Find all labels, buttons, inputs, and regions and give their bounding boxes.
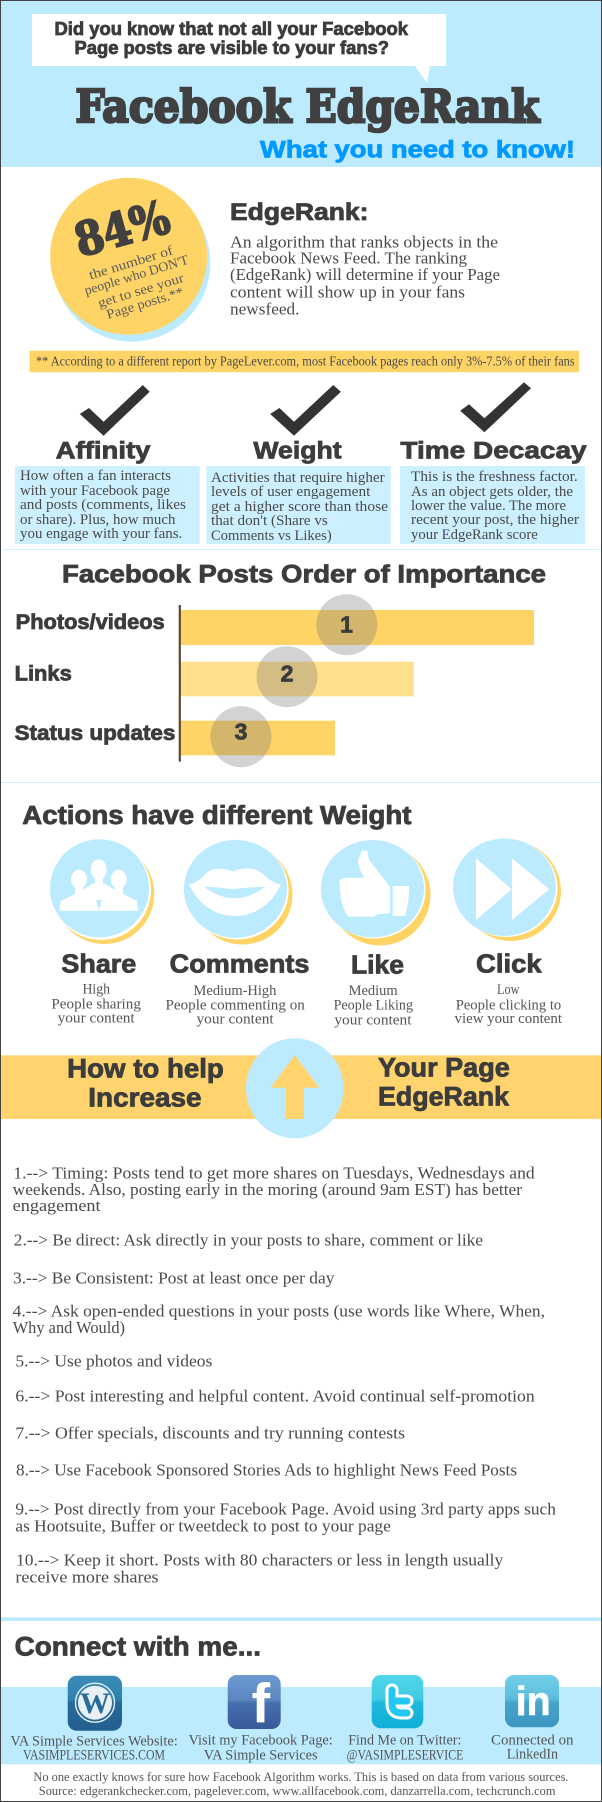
- definition text: newsfeed.: [230, 299, 300, 318]
- facebook link text: VA Simple Services: [204, 1748, 318, 1764]
- icon: check mark: [460, 382, 531, 432]
- share description: High: [82, 981, 110, 997]
- twitter link text: [347, 1732, 463, 1764]
- tip 9: 9.--> Post directly from your Facebook Page. Avoid using 3rd party apps such: [15, 1499, 557, 1518]
- tip 1: [13, 1163, 535, 1215]
- weight text box: Activities that require higher: [211, 470, 385, 486]
- banner text left: Increase: [88, 1083, 202, 1113]
- tip 6: 6.--> Post interesting and helpful content. Avoid continual self-promotion: [15, 1386, 535, 1405]
- tip 10: receive more shares: [15, 1567, 159, 1586]
- icon: people: [50, 839, 154, 944]
- website link text: VASIMPLESERVICES.COM: [23, 1748, 165, 1764]
- action: comments: [166, 840, 309, 1027]
- label: photos and videos: Photos/videos: [16, 610, 165, 634]
- subtitle: What you need to know!: [260, 137, 575, 164]
- tip 4: Why and Would): [13, 1318, 125, 1337]
- banner text right: EdgeRank: [378, 1082, 509, 1112]
- like description: your content: [334, 1012, 412, 1028]
- icon: fast forward: [453, 838, 561, 941]
- rank marker 2: [256, 646, 318, 707]
- weight text box: get a higher score than those: [211, 499, 388, 515]
- stat number: 84%: [69, 190, 175, 268]
- footer sources: No one exactly knows for sure how Facebook Algorithm works. This is based on data from various sources.: [33, 1769, 568, 1784]
- affinity text box: How often a fan interacts: [20, 468, 171, 484]
- affinity text box: with your Facebook page: [20, 483, 170, 499]
- panel: weight: [206, 385, 391, 544]
- action: click: [453, 838, 563, 1027]
- time decacay text box: lower the value. The more: [411, 498, 566, 514]
- connect background band: [0, 1687, 602, 1764]
- comments description: People commenting on: [166, 997, 305, 1013]
- linkedin link text: LinkedIn: [507, 1746, 558, 1762]
- tip 7: 7.--> Offer specials, discounts and try running contests: [15, 1423, 405, 1442]
- affinity text box: or share). Plus, how much: [20, 512, 176, 528]
- affinity text box: [15, 466, 200, 544]
- stat caption: get to see your: [96, 270, 186, 310]
- tip 4: 4.--> Ask open-ended questions in your posts (use words like Where, When,: [13, 1301, 545, 1320]
- rank marker 3: [210, 706, 271, 767]
- panel: EdgeRank definition: [230, 199, 500, 318]
- linkedin link text: [491, 1732, 574, 1762]
- footnote bar: [30, 351, 579, 372]
- time decacay text box: [400, 466, 585, 544]
- panel: posts order of importance: [15, 561, 546, 767]
- banner text left: [67, 1054, 224, 1113]
- action: share: [50, 839, 154, 1026]
- icon: wordpress: W: [80, 1687, 110, 1720]
- rank marker 1: 1: [340, 612, 353, 638]
- twitter link text: Find Me on Twitter:: [348, 1732, 461, 1748]
- like description: [334, 983, 413, 1028]
- share description: People sharing: [51, 996, 141, 1012]
- like description: People Liking: [334, 997, 413, 1013]
- label: status updates: Status updates: [15, 721, 175, 745]
- tip 3: 3.--> Be Consistent: Post at least once per day: [13, 1268, 335, 1287]
- comments description: your content: [196, 1011, 275, 1027]
- tip 2: 2.--> Be direct: Ask directly in your posts to share, comment or like: [14, 1230, 483, 1249]
- speech bubble: Page posts are visible to your fans?: [74, 37, 389, 58]
- weight heading: Weight: [253, 437, 342, 464]
- icon: check mark: [270, 385, 341, 436]
- time decacay text box: This is the freshness factor.: [411, 469, 578, 485]
- click description: [454, 982, 563, 1027]
- weight text box: [206, 466, 391, 544]
- footer sources: [33, 1769, 568, 1798]
- bar: status updates: [181, 721, 335, 755]
- affinity text box: you engage with your fans.: [20, 526, 182, 542]
- tip 4: [13, 1301, 545, 1337]
- time decacay text box: recent your post, the higher: [411, 512, 579, 528]
- banner text right: [378, 1053, 510, 1112]
- panel: connect with me: [0, 1632, 602, 1764]
- comments label: Comments: [170, 949, 309, 979]
- affinity text box: and posts (comments, likes: [20, 497, 186, 513]
- rank marker 1: [316, 594, 377, 655]
- twitter link text: @VASIMPLESERVICE: [347, 1748, 463, 1764]
- speech bubble: [32, 14, 446, 83]
- tip 1: weekends. Also, posting early in the moring (around 9am EST) has better: [13, 1180, 523, 1199]
- banner text left: How to help: [67, 1054, 224, 1084]
- time decacay text box: your EdgeRank score: [411, 527, 538, 543]
- like label: Like: [351, 949, 404, 979]
- panel: how to increase banner: [0, 1038, 602, 1138]
- definition text: (EdgeRank) will determine if your Page: [230, 265, 500, 284]
- header background: [0, 0, 602, 167]
- rank marker 3: 3: [235, 718, 247, 744]
- action: like: [321, 840, 430, 1028]
- chart heading: Facebook Posts Order of Importance: [62, 561, 546, 589]
- tip 9: as Hootsuite, Buffer or tweetdeck to post to your page: [15, 1516, 391, 1535]
- circle shadow: [53, 184, 210, 342]
- definition text: content will show up in your fans: [230, 282, 465, 301]
- linkedin link text: Connected on: [491, 1732, 574, 1748]
- banner background: [0, 1055, 602, 1119]
- like description: Medium: [349, 983, 398, 999]
- chart axis: [179, 605, 181, 762]
- comments description: [166, 983, 305, 1027]
- time decacay heading: Time Decacay: [400, 437, 587, 464]
- icon: check mark: [80, 385, 150, 436]
- banner text right: Your Page: [378, 1053, 510, 1083]
- definition text: An algorithm that ranks objects in the: [230, 232, 498, 251]
- stat caption: [82, 242, 191, 322]
- tip 10: [15, 1550, 504, 1586]
- stat caption: people who DON'T: [82, 252, 191, 298]
- definition text: Facebook News Feed. The ranking: [230, 248, 467, 267]
- panel: affinity: [15, 385, 200, 544]
- icon: linkedin: in: [516, 1678, 551, 1724]
- circle: [50, 178, 207, 335]
- tip 8: 8.--> Use Facebook Sponsored Stories Ads to highlight News Feed Posts: [16, 1460, 517, 1479]
- header panel: [0, 0, 602, 167]
- share description: [51, 981, 141, 1026]
- panel: actions have different weight: [22, 802, 563, 1028]
- comments description: Medium-High: [194, 983, 277, 999]
- time decacay text box: As an object gets older, the: [411, 484, 573, 500]
- affinity heading: Affinity: [56, 437, 151, 464]
- click description: view your content: [454, 1011, 563, 1027]
- icon: wordpress: [68, 1676, 122, 1731]
- definition text: [230, 232, 500, 318]
- weight text box: Comments vs Likes): [211, 528, 332, 544]
- panel: time decay: [400, 382, 587, 544]
- icon: facebook: [228, 1671, 281, 1734]
- label: links: Links: [15, 662, 72, 686]
- weight text box: levels of user engagement: [211, 484, 371, 500]
- share description: your content: [58, 1010, 136, 1026]
- speech bubble: Did you know that not all your Facebook: [54, 18, 409, 39]
- facebook link text: [188, 1732, 333, 1764]
- facebook link text: Visit my Facebook Page:: [188, 1732, 333, 1748]
- website link text: VA Simple Services Website:: [10, 1734, 178, 1750]
- weight text box: that don't (Share vs: [211, 513, 328, 529]
- tip 10: 10.--> Keep it short. Posts with 80 characters or less in length usually: [16, 1550, 504, 1569]
- rank marker 2: 2: [281, 661, 293, 687]
- stat caption: Page posts.**: [104, 284, 186, 322]
- icon: lips: [184, 840, 292, 944]
- tip 5: 5.--> Use photos and videos: [15, 1351, 212, 1370]
- footer sources: Source: edgerankchecker.com, pagelever.com, www.allfacebook.com, danzarrella.com, techcrunch.com: [39, 1783, 556, 1798]
- tip 1: 1.--> Timing: Posts tend to get more shares on Tuesdays, Wednesdays and: [13, 1163, 535, 1182]
- panel: tips list: [13, 1163, 557, 1586]
- icon: facebook: f: [252, 1671, 270, 1734]
- definition heading: EdgeRank:: [230, 199, 368, 226]
- bar: photos and videos: [181, 610, 534, 645]
- bar: links: [181, 662, 414, 696]
- bar chart: [15, 594, 534, 767]
- icon: thumbs up: [321, 840, 430, 946]
- panel: 84 percent stat: [50, 178, 210, 342]
- title: Facebook EdgeRank: [76, 80, 540, 133]
- tip 1: engagement: [13, 1196, 101, 1215]
- click description: People clicking to: [456, 997, 561, 1013]
- stat caption: the number of: [87, 242, 175, 282]
- share label: Share: [61, 949, 136, 979]
- icon: arrow circle: [246, 1038, 344, 1138]
- actions heading: Actions have different Weight: [22, 802, 412, 830]
- tip 9: [15, 1499, 557, 1535]
- click label: Click: [476, 949, 542, 979]
- website link text: [10, 1734, 178, 1764]
- icon: twitter: [372, 1675, 423, 1728]
- connect heading: Connect with me...: [15, 1632, 261, 1662]
- click description: Low: [497, 982, 520, 998]
- icon: linkedin: [505, 1675, 559, 1727]
